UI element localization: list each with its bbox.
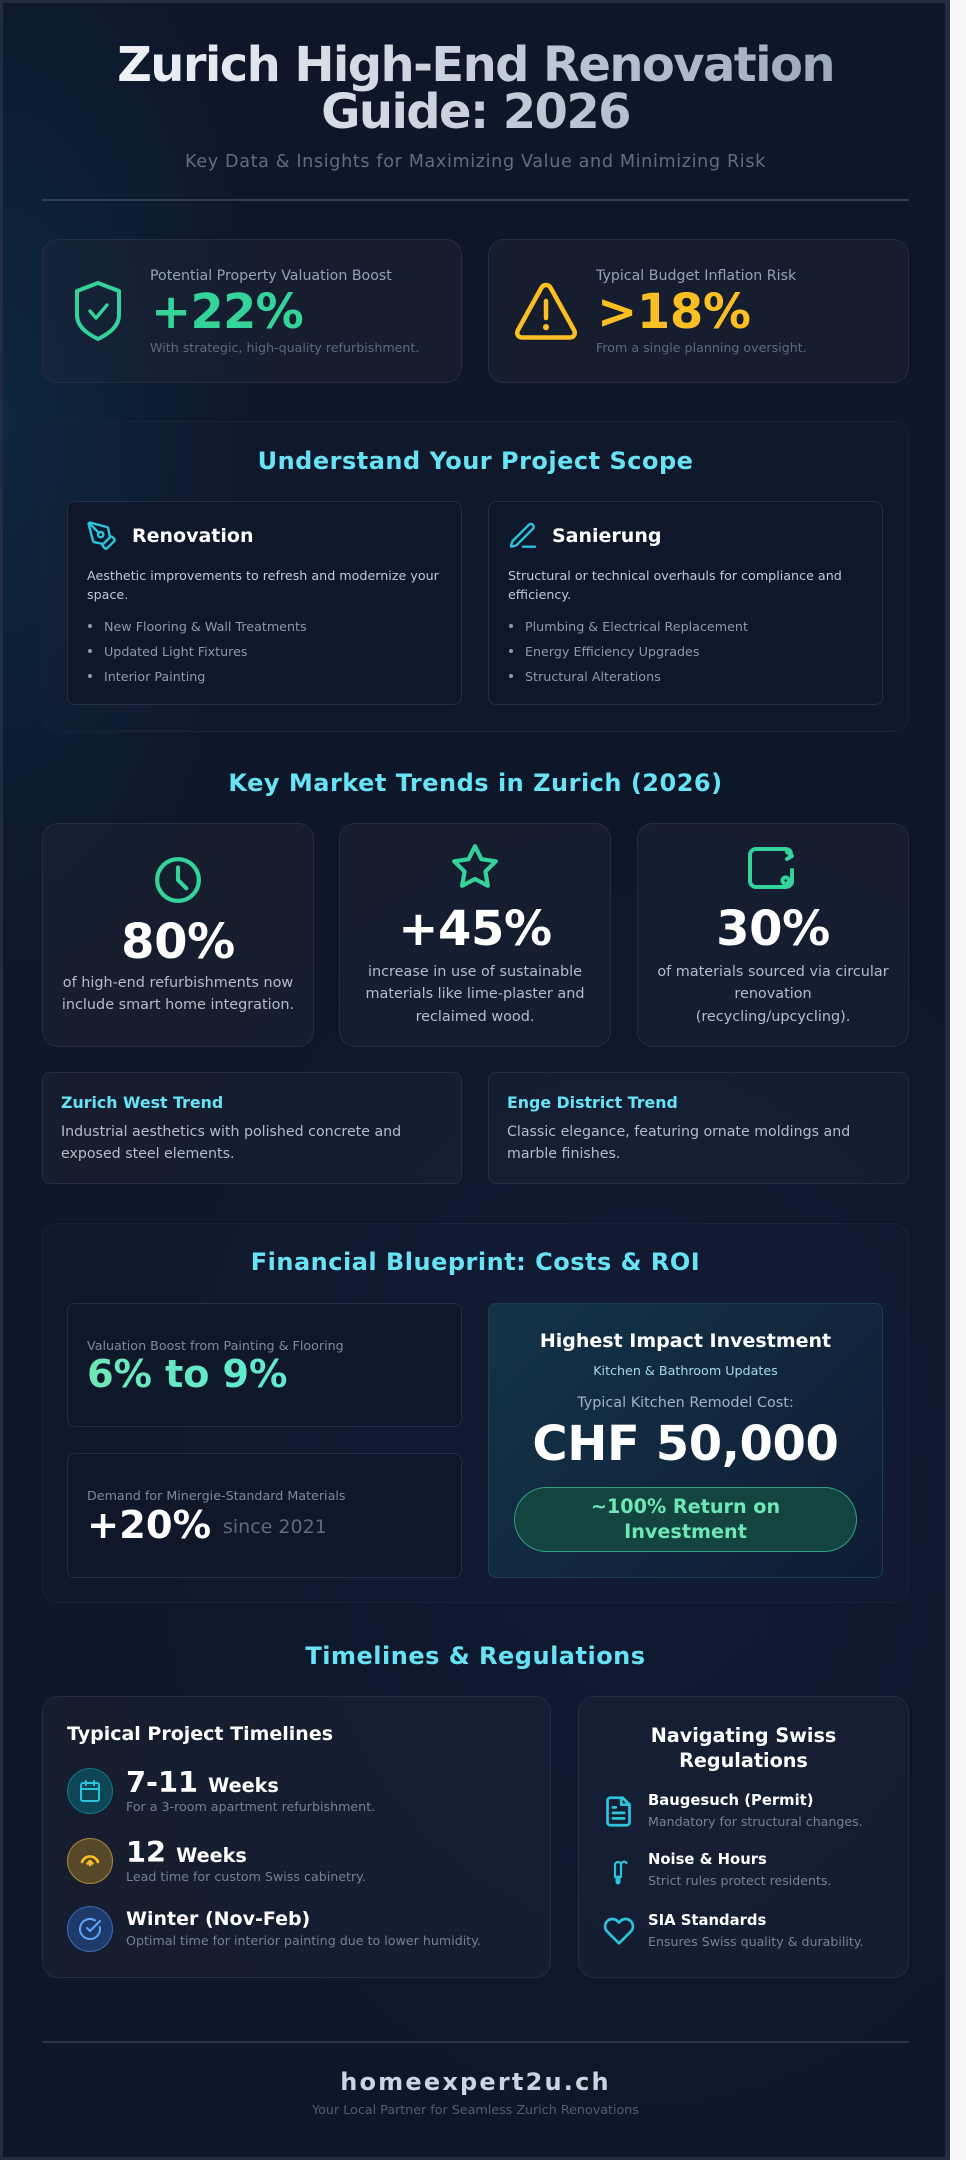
card title: Typical Project Timelines <box>67 1723 333 1745</box>
regulation: SIA <box>604 1912 863 1949</box>
regulation text: Ensures Swiss quality & durability. <box>648 1934 863 1949</box>
subtitle: Key Data & Insights for Maximizing Value and Minimizing Risk <box>185 152 766 172</box>
trend text: Industrial aesthetics with polished concrete and exposed steel elements. <box>61 1124 401 1162</box>
value: +45% <box>398 901 552 957</box>
card: renovation <box>67 501 462 705</box>
cost label: Typical Kitchen Remodel Cost: <box>577 1395 794 1411</box>
list: Plumbing & Electrical Replacement <box>525 619 748 634</box>
panel: project scope <box>42 421 909 732</box>
timeline row: 7-11 weeks <box>67 1765 375 1814</box>
trend: zurich west <box>42 1072 462 1184</box>
label: Demand for Minergie-Standard Materials <box>87 1488 346 1503</box>
value: 6% to 9% <box>87 1352 287 1397</box>
list <box>509 619 748 684</box>
section: timelines and regulations <box>42 1642 909 1978</box>
heading: Key Market Trends in Zurich (2026) <box>228 769 723 797</box>
heading: Financial Blueprint: Costs & ROI <box>251 1248 700 1276</box>
regulation: permit <box>606 1792 863 1829</box>
roi pill: ~100% Return on Investment <box>591 1495 780 1543</box>
trend: enge district <box>488 1072 909 1184</box>
card title: Navigating Swiss Regulations <box>651 1724 836 1772</box>
note: From a single planning oversight. <box>596 340 807 355</box>
timeline row: 12 weeks <box>67 1835 366 1884</box>
header divider <box>42 199 909 201</box>
panel: financial blueprint <box>42 1223 909 1603</box>
roi pill <box>514 1487 857 1552</box>
list: Energy Efficiency Upgrades <box>525 644 699 659</box>
stat card: valuation boost <box>42 239 462 383</box>
trend title: Zurich West Trend <box>61 1093 223 1112</box>
stat: smart home <box>42 823 314 1047</box>
text: increase in use of sustainable materials like lime-plaster and reclaimed wood. <box>366 964 584 1025</box>
icon: warning triangle <box>514 282 578 340</box>
text: renovation <box>734 986 812 1002</box>
trend text: Classic elegance, featuring ornate moldings and marble finishes. <box>507 1124 850 1162</box>
trend title: Enge District Trend <box>507 1093 678 1112</box>
stat: sustainable materials <box>339 823 611 1047</box>
note: Optimal time for interior painting due to lower humidity. <box>126 1933 481 1948</box>
regulation text: Strict rules protect residents. <box>648 1873 832 1888</box>
timeline row: winter <box>67 1906 481 1952</box>
icon: document <box>606 1796 631 1827</box>
regulation title: Baugesuch (Permit) <box>648 1792 814 1809</box>
icon: star <box>452 844 498 888</box>
icon: calendar <box>67 1768 113 1814</box>
duration: 12 Weeks <box>126 1835 247 1869</box>
note: For a 3-room apartment refurbishment. <box>126 1799 375 1814</box>
label: Potential Property Valuation Boost <box>150 268 392 284</box>
card: painting flooring <box>67 1303 462 1427</box>
card: project timelines <box>42 1696 551 1978</box>
value: +22% <box>151 284 303 340</box>
description: Aesthetic improvements to refresh and modernize your space. <box>87 568 439 602</box>
icon: clock <box>155 857 201 903</box>
section: market trends <box>42 769 909 1184</box>
header <box>42 37 909 201</box>
icon: circle check <box>67 1906 113 1952</box>
list: New Flooring & Wall Treatments <box>104 619 307 634</box>
duration: 7-11 Weeks <box>126 1765 279 1799</box>
cost value: CHF 50,000 <box>532 1416 839 1472</box>
icon: pen tool <box>87 522 116 550</box>
tagline: Your Local Partner for Seamless Zurich Renovations <box>312 2102 639 2117</box>
season: Winter (Nov-Feb) <box>126 1908 310 1930</box>
card: highest impact <box>488 1303 883 1578</box>
note: Lead time for custom Swiss cabinetry. <box>126 1869 366 1884</box>
card title: Renovation <box>132 525 253 547</box>
title: Zurich High-End Renovation <box>117 37 834 93</box>
text: (recycling/upcycling). <box>696 1009 850 1025</box>
subtitle: Kitchen & Bathroom Updates <box>593 1363 778 1378</box>
title: Guide: 2026 <box>321 84 630 140</box>
heading: Timelines & Regulations <box>305 1642 646 1670</box>
value: 80% <box>121 914 235 970</box>
card title: Sanierung <box>552 525 661 547</box>
label: Valuation Boost from Painting & Flooring <box>87 1338 344 1353</box>
icon: pen line <box>510 522 536 548</box>
since note: since 2021 <box>223 1516 327 1538</box>
icon: recycle <box>748 847 794 889</box>
footer divider <box>42 2041 909 2043</box>
list <box>88 619 307 684</box>
text <box>657 964 889 1025</box>
list: Interior Painting <box>104 669 205 684</box>
icon: shield check <box>75 281 121 341</box>
icon: tap <box>614 1860 628 1884</box>
title <box>42 42 909 136</box>
description: Structural or technical overhauls for compliance and efficiency. <box>508 568 842 602</box>
card: swiss regulations <box>578 1696 909 1978</box>
text: of materials sourced via circular <box>657 964 889 980</box>
text: of high-end refurbishments now include smart home integration. <box>62 975 294 1013</box>
stat card: budget risk <box>488 239 909 383</box>
icon: heart <box>604 1918 634 1945</box>
list: Structural Alterations <box>525 669 661 684</box>
regulation: noise <box>614 1851 832 1888</box>
icon: gauge <box>67 1838 113 1884</box>
label: Typical Budget Inflation Risk <box>596 268 796 284</box>
footer <box>42 2041 909 2117</box>
card title: Highest Impact Investment <box>540 1330 831 1352</box>
card: minergie <box>67 1453 462 1578</box>
regulation text: Mandatory for structural changes. <box>648 1814 863 1829</box>
note: With strategic, high-quality refurbishment. <box>150 340 419 355</box>
heading: Understand Your Project Scope <box>258 447 693 475</box>
brand: homeexpert2u.ch <box>340 2068 611 2096</box>
value: +20% <box>87 1503 211 1548</box>
value: >18% <box>597 284 751 340</box>
list: Updated Light Fixtures <box>104 644 248 659</box>
regulation title: Noise & Hours <box>648 1851 767 1868</box>
regulation title: SIA Standards <box>648 1912 766 1929</box>
card: sanierung <box>488 501 883 705</box>
stat: circular materials <box>637 823 909 1047</box>
value: 30% <box>716 901 830 957</box>
